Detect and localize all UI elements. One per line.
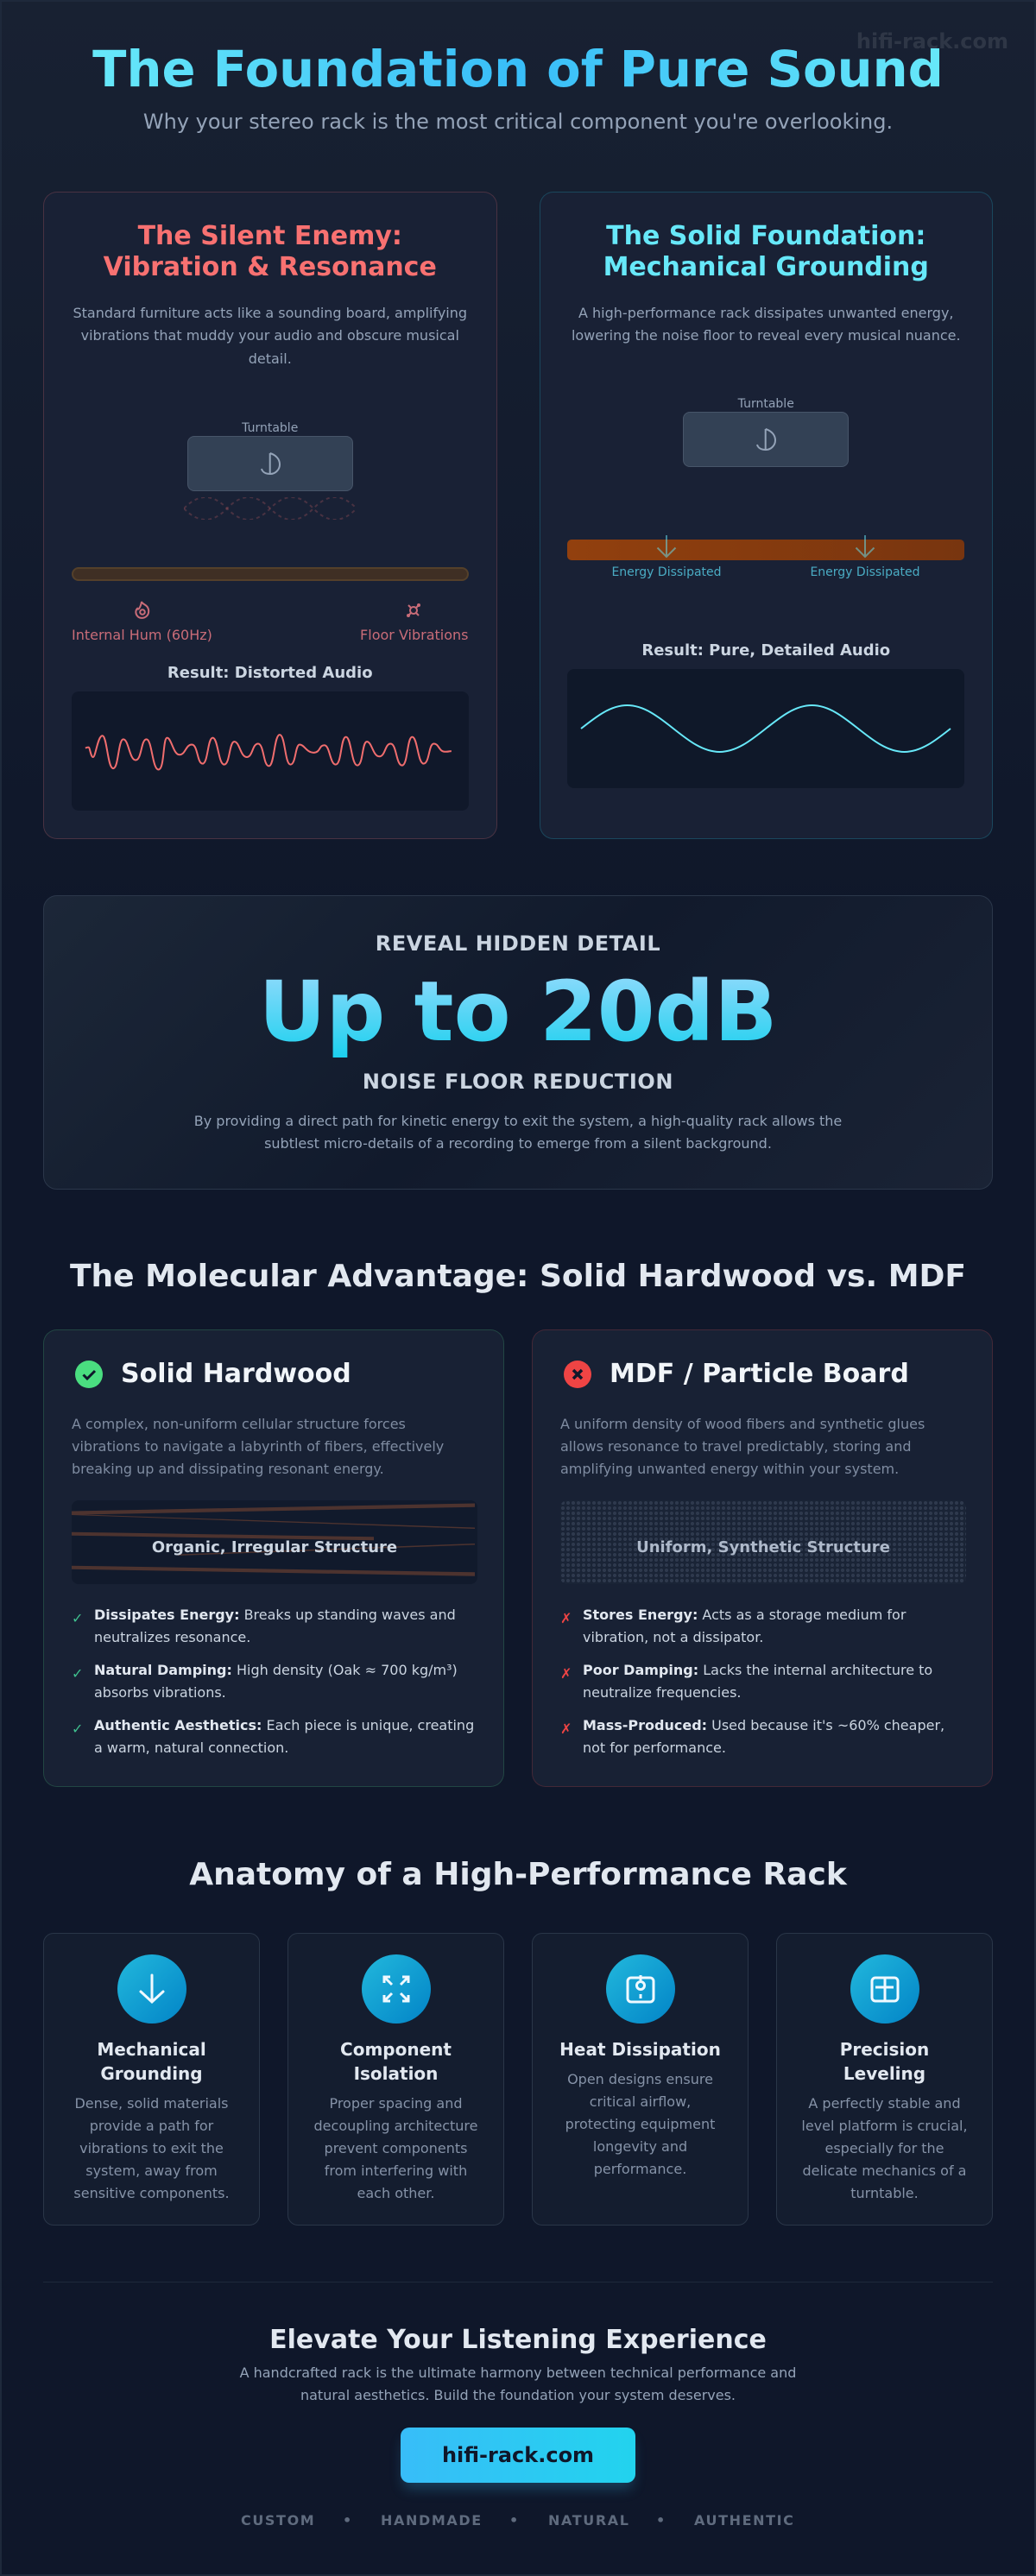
card: heat dissipation bbox=[532, 1933, 749, 2226]
text: solid foundation description: lowering the noise floor to reveal every musical nuance. bbox=[572, 327, 961, 344]
icon: down arrow bbox=[117, 1954, 186, 2024]
diagram: organic grain structure: Organic, Irregular Structure bbox=[152, 1538, 397, 1556]
icon: level box bbox=[850, 1954, 919, 2024]
subtitle: Why your stereo rack is the most critical component you're overlooking. bbox=[143, 110, 893, 134]
card text: especially for the bbox=[824, 2140, 944, 2156]
list item: authentic aesthetics: ✓ bbox=[72, 1720, 83, 1737]
card: precision leveling bbox=[776, 1933, 993, 2226]
list item: authentic aesthetics bbox=[72, 1717, 474, 1756]
icon: outward arrows bbox=[361, 1954, 430, 2024]
list item: dissipates energy: ✓ bbox=[72, 1610, 83, 1626]
list item: dissipates energy: neutralizes resonance. bbox=[94, 1629, 250, 1645]
list item: mass produced: ✗ bbox=[560, 1720, 572, 1737]
button: hifi-rack.com bbox=[401, 2428, 635, 2483]
text: silent enemy description bbox=[73, 305, 467, 367]
card text: level platform is crucial, bbox=[801, 2118, 968, 2134]
list item: natural damping: Natural Damping: High density (Oak ≈ 700 kg/m³) bbox=[94, 1662, 458, 1678]
footer text bbox=[240, 2364, 796, 2403]
card text: A perfectly stable and bbox=[808, 2095, 961, 2112]
card text: critical airflow, bbox=[590, 2093, 691, 2110]
card: component isolation bbox=[287, 1933, 504, 2226]
card text: protecting equipment bbox=[565, 2116, 715, 2132]
diagram: organic grain structure bbox=[72, 1500, 477, 1584]
label: floor vibrations: Floor Vibrations bbox=[360, 627, 468, 643]
list item: stores energy bbox=[560, 1607, 906, 1645]
label: turntable: Turntable bbox=[738, 397, 794, 411]
list item: dissipates energy: Dissipates Energy: Breaks up standing waves and bbox=[94, 1607, 456, 1623]
icon: floor vibrations bbox=[407, 603, 420, 617]
text: hardwood description: breaking up and dissipating resonant energy. bbox=[72, 1461, 384, 1476]
tag: handmade: HANDMADE bbox=[381, 2512, 483, 2529]
list item: poor damping: Poor Damping: Lacks the internal architecture to bbox=[583, 1662, 932, 1678]
separator dot: • bbox=[656, 2512, 665, 2529]
vibration wave: dashed bbox=[184, 497, 355, 520]
card text: delicate mechanics of a bbox=[803, 2162, 966, 2179]
list item: authentic aesthetics: Authentic Aesthetics: Each piece is unique, creating bbox=[94, 1717, 474, 1733]
card text bbox=[801, 2095, 968, 2201]
title: The Foundation of Pure Sound bbox=[92, 41, 944, 98]
label: energy dissipated left: Energy Dissipated bbox=[611, 565, 722, 579]
label: turntable: Turntable bbox=[242, 421, 298, 435]
separator dot: • bbox=[509, 2512, 518, 2529]
card text bbox=[314, 2095, 477, 2201]
stat kicker: REVEAL HIDDEN DETAIL bbox=[376, 931, 660, 956]
card title bbox=[97, 2039, 206, 2084]
icon: internal hum bbox=[135, 601, 150, 619]
card text: turntable. bbox=[850, 2185, 919, 2201]
list item: poor damping: neutralize frequencies. bbox=[583, 1684, 741, 1701]
label: energy dissipated right: Energy Dissipated bbox=[810, 565, 920, 579]
text: hardwood description bbox=[72, 1416, 444, 1476]
heading: mdf: MDF / Particle Board bbox=[610, 1359, 909, 1389]
panel: mdf particle board bbox=[532, 1329, 993, 1787]
panel heading: solid foundation: Mechanical Grounding bbox=[603, 252, 929, 282]
big stat: Up to 20dB bbox=[259, 963, 777, 1060]
list item: stores energy: Stores Energy: Acts as a storage medium for bbox=[583, 1607, 906, 1623]
watermark: hifi-rack.com bbox=[856, 29, 1008, 54]
card title: Component bbox=[340, 2039, 452, 2060]
card text bbox=[73, 2095, 230, 2201]
footer text: natural aesthetics. Build the foundation your system deserves. bbox=[300, 2387, 736, 2403]
result label: distorted: Result: Distorted Audio bbox=[167, 664, 373, 682]
diagram: uniform dotted structure bbox=[560, 1500, 966, 1584]
list item: stores energy: vibration, not a dissipator. bbox=[583, 1629, 763, 1645]
text: solid foundation description: A high-performance rack dissipates unwanted energy, bbox=[578, 305, 953, 321]
card text: Open designs ensure bbox=[567, 2071, 713, 2087]
panel: solid hardwood bbox=[43, 1329, 504, 1787]
list item: mass produced: not for performance. bbox=[583, 1739, 726, 1756]
card title bbox=[340, 2039, 452, 2084]
card text: prevent components bbox=[325, 2140, 467, 2156]
turntable box with note icon bbox=[682, 412, 848, 467]
card text: each other. bbox=[357, 2185, 434, 2201]
card title: Isolation bbox=[354, 2063, 438, 2084]
text: hardwood description: A complex, non-uniform cellular structure forces bbox=[72, 1416, 406, 1431]
card text bbox=[565, 2071, 715, 2177]
card title: Leveling bbox=[843, 2063, 925, 2084]
tag: custom: CUSTOM bbox=[241, 2512, 315, 2529]
shelf: solid hardwood board bbox=[567, 540, 964, 560]
tag: natural: NATURAL bbox=[548, 2512, 630, 2529]
label: internal hum: Internal Hum (60Hz) bbox=[72, 627, 212, 643]
card text: Dense, solid materials bbox=[74, 2095, 229, 2112]
icon: red cross bbox=[564, 1361, 591, 1388]
panel heading: solid foundation bbox=[603, 221, 929, 282]
panel: the solid foundation bbox=[539, 192, 993, 839]
card text: system, away from bbox=[85, 2162, 218, 2179]
text: stat explanation bbox=[194, 1113, 842, 1152]
shelf: weak board bbox=[72, 567, 469, 581]
icon: vented box bbox=[606, 1954, 675, 2024]
card text: sensitive components. bbox=[73, 2185, 230, 2201]
chart: distorted waveform bbox=[72, 691, 469, 811]
list item: stores energy: ✗ bbox=[560, 1610, 572, 1626]
card title: Heat Dissipation bbox=[559, 2039, 721, 2060]
list item: natural damping: ✓ bbox=[72, 1665, 83, 1682]
list item: mass produced: Mass-Produced: Used because it's ~60% cheaper, bbox=[583, 1717, 944, 1733]
panel heading: solid foundation: The Solid Foundation: bbox=[606, 221, 925, 251]
result label: pure: Result: Pure, Detailed Audio bbox=[641, 641, 890, 660]
panel heading: silent enemy: The Silent Enemy: bbox=[138, 221, 402, 251]
panel heading: silent enemy: Vibration & Resonance bbox=[104, 252, 437, 282]
text: mdf description: allows resonance to travel predictably, storing and bbox=[560, 1438, 912, 1454]
card text: longevity and bbox=[593, 2138, 687, 2155]
card title bbox=[840, 2039, 929, 2084]
list item: authentic aesthetics: a warm, natural connection. bbox=[94, 1739, 288, 1756]
text: silent enemy description: Standard furniture acts like a sounding board, amplifying bbox=[73, 305, 467, 321]
text: mdf description: A uniform density of wood fibers and synthetic glues bbox=[560, 1416, 925, 1431]
panel: noise floor highlight bbox=[43, 895, 993, 1190]
turntable box with note icon bbox=[187, 436, 353, 491]
panel heading: silent enemy bbox=[104, 221, 437, 282]
card text: performance. bbox=[594, 2161, 686, 2177]
list item: dissipates energy bbox=[72, 1607, 456, 1645]
card text: Proper spacing and bbox=[329, 2095, 463, 2112]
footer: call to action bbox=[240, 2325, 796, 2529]
diagram: uniform dotted structure: Uniform, Synthetic Structure bbox=[636, 1538, 890, 1556]
tag: authentic: AUTHENTIC bbox=[694, 2512, 795, 2529]
card text: from interfering with bbox=[325, 2162, 467, 2179]
card title: Grounding bbox=[100, 2063, 203, 2084]
card text: decoupling architecture bbox=[314, 2118, 477, 2134]
list item: mass produced bbox=[560, 1717, 944, 1756]
text: silent enemy description: detail. bbox=[249, 350, 292, 367]
card: mechanical grounding bbox=[43, 1933, 260, 2226]
stat caption: NOISE FLOOR REDUCTION bbox=[363, 1070, 673, 1094]
arrow: energy dissipated left bbox=[656, 535, 677, 558]
footer text: A handcrafted rack is the ultimate harmony between technical performance and bbox=[240, 2364, 796, 2381]
list item: poor damping: ✗ bbox=[560, 1665, 572, 1682]
card title: Precision bbox=[840, 2039, 929, 2060]
list item: poor damping bbox=[560, 1662, 932, 1701]
text: mdf description bbox=[560, 1416, 925, 1476]
button: hifi-rack.com: hifi-rack.com bbox=[442, 2443, 594, 2467]
separator dot: • bbox=[343, 2512, 351, 2529]
section heading: anatomy: Anatomy of a High-Performance Rack bbox=[189, 1857, 847, 1892]
card text: vibrations to exit the bbox=[79, 2140, 224, 2156]
heading: solid hardwood: Solid Hardwood bbox=[121, 1359, 351, 1389]
text: solid foundation description bbox=[572, 305, 961, 344]
text: hardwood description: vibrations to navigate a labyrinth of fibers, effectively bbox=[72, 1438, 444, 1454]
chart: clean sine waveform bbox=[567, 669, 964, 788]
list item: natural damping bbox=[72, 1662, 458, 1701]
text: mdf description: amplifying unwanted energy within your system. bbox=[560, 1461, 899, 1476]
footer heading: Elevate Your Listening Experience bbox=[269, 2325, 767, 2355]
list item: natural damping: absorbs vibrations. bbox=[94, 1684, 226, 1701]
card title: Mechanical bbox=[97, 2039, 206, 2060]
text: stat explanation: subtlest micro-details of a recording to emerge from a silent background. bbox=[264, 1135, 772, 1152]
icon: green check bbox=[75, 1361, 103, 1388]
section heading: molecular advantage: The Molecular Advantage: Solid Hardwood vs. MDF bbox=[70, 1259, 966, 1294]
panel: the silent enemy bbox=[43, 192, 497, 839]
text: stat explanation: By providing a direct path for kinetic energy to exit the system, a high-quality rack allows the bbox=[194, 1113, 842, 1129]
card text: provide a path for bbox=[90, 2118, 213, 2134]
text: silent enemy description: vibrations that muddy your audio and obscure musical bbox=[81, 327, 459, 344]
arrow: energy dissipated right bbox=[855, 535, 875, 558]
